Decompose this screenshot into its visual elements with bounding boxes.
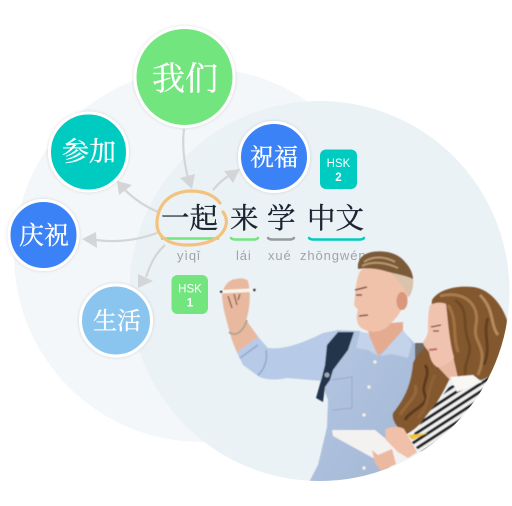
badge: HSK 1: HSK: [178, 284, 202, 296]
arrows: [82, 129, 240, 288]
background circle: inner: [130, 101, 510, 481]
marker pen: [220, 290, 256, 292]
man: face: [354, 264, 411, 332]
heading: sentence: 中文: [307, 203, 364, 235]
node: 庆祝: [9, 200, 78, 270]
man: bracelet: [229, 320, 247, 334]
node: 我们: 我们: [152, 62, 218, 98]
pinyin labels: xué: [268, 248, 292, 263]
woman: hand on notebook: [385, 427, 417, 458]
woman: collar: [450, 375, 482, 392]
node: 参加: 参加: [62, 137, 116, 167]
pinyin labels: lái: [236, 248, 252, 263]
man: sleeve: [237, 330, 346, 381]
arrow: 我们 to 一起: [180, 129, 195, 189]
man: hair fade: [392, 272, 414, 297]
woman: curls: [400, 295, 498, 420]
man: hand under notebook: [372, 449, 396, 471]
man: shirt buttons: [362, 360, 377, 470]
man: ear: [396, 292, 408, 310]
heading: sentence: 学: [267, 203, 296, 235]
man: brow, eye and mouth: [355, 287, 368, 316]
heading: sentence: 来: [230, 203, 259, 235]
highlight ring: [157, 191, 226, 245]
badge: HSK 1: 1: [187, 298, 194, 310]
pinyin labels: yìqǐ: [177, 248, 201, 263]
node: 参加: [50, 113, 128, 191]
pinyin labels: zhōngwén: [300, 248, 366, 263]
badge: HSK 2: HSK: [327, 158, 351, 170]
man: fingers: [228, 294, 240, 308]
node: 生活: 生活: [93, 308, 141, 335]
woman: backpack shade: [414, 342, 426, 359]
node: 祝福: 祝福: [250, 144, 298, 172]
woman: eye, brow and lips: [431, 325, 441, 331]
woman: neck: [437, 356, 458, 380]
word underlines: [162, 238, 364, 240]
man: forearm and hand: [222, 278, 259, 359]
arrow: 一起 to 庆祝: [82, 232, 157, 248]
photo: two students: [220, 251, 507, 490]
woman: pencil: [408, 433, 428, 440]
woman: back hair: [393, 287, 507, 434]
pinyin labels: [177, 248, 366, 263]
node: 庆祝: 庆祝: [19, 222, 69, 250]
notebook: [332, 430, 408, 464]
background circle: outer: [14, 68, 388, 442]
badge: HSK 2: 2: [335, 172, 342, 184]
man: hair: [358, 251, 413, 279]
man: shirt torso: [310, 330, 416, 481]
woman: face: [423, 303, 454, 367]
man: neck: [367, 322, 403, 356]
badge: HSK 2: [320, 150, 357, 189]
man: backpack strap: [316, 332, 354, 402]
node: 祝福: [240, 122, 308, 192]
heading: sentence: [161, 203, 364, 235]
heading: sentence: 一起: [161, 203, 218, 235]
man: pocket: [332, 377, 352, 410]
node: 我们: [135, 28, 234, 126]
arrow: 一起 to 祝福: [213, 169, 240, 190]
man: collar: [356, 330, 412, 358]
man: strap buckle: [324, 372, 330, 378]
woman: striped top: [410, 376, 490, 452]
badge: HSK 1: [172, 275, 208, 314]
node: 生活: [80, 285, 152, 356]
arrow: 一起 to 生活: [138, 245, 165, 288]
arrow: 一起 to 参加: [117, 181, 158, 212]
